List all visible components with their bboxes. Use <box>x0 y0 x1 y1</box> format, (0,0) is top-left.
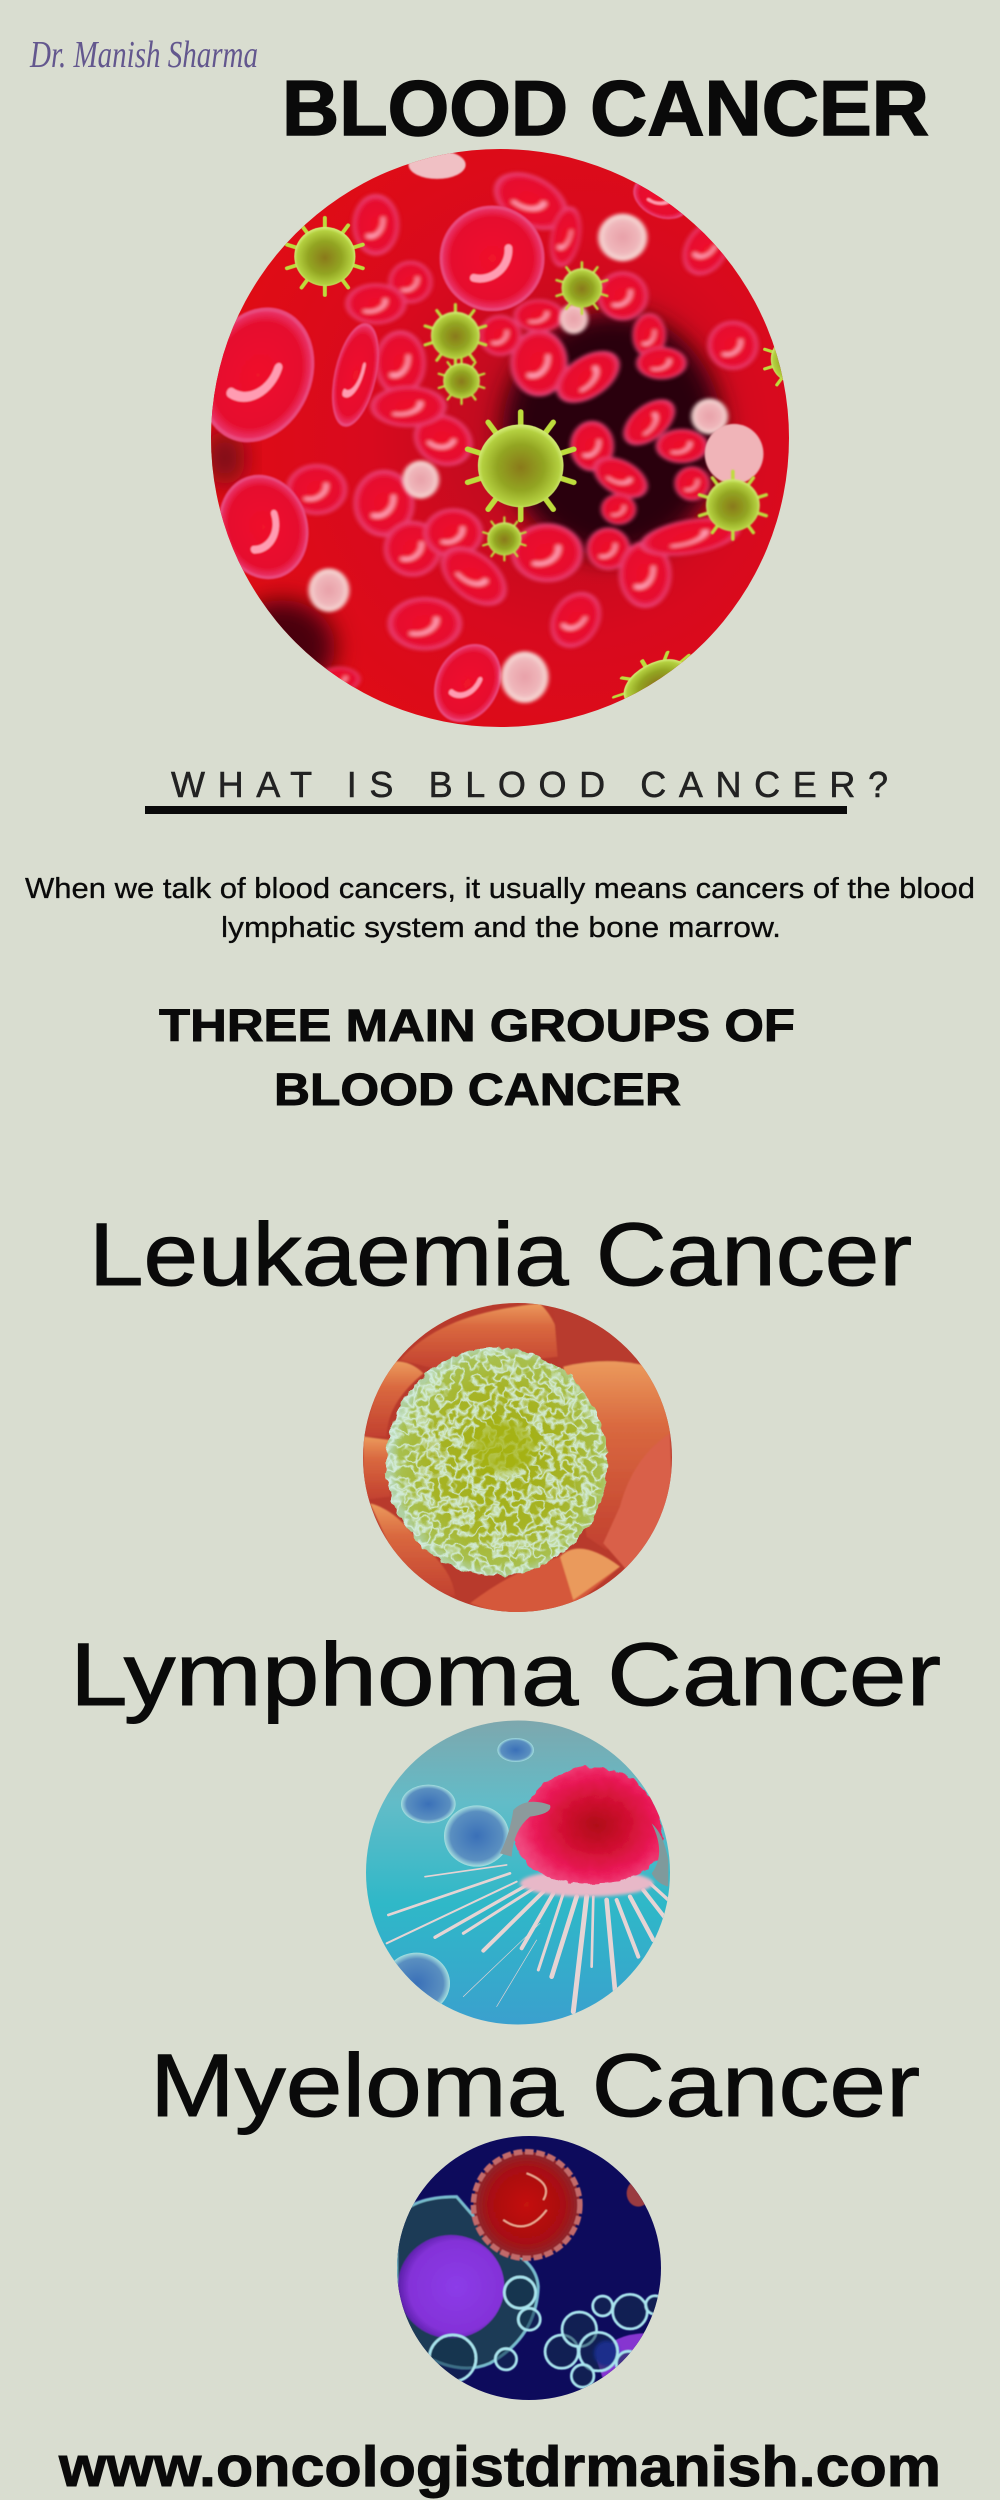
tendrils <box>387 1865 668 2012</box>
heading underline <box>145 806 847 814</box>
image: leukaemia cell <box>360 1300 675 1617</box>
dark shadow lower left <box>254 583 352 674</box>
green leukaemia cell <box>386 1348 607 1576</box>
surrounding red blood cells <box>363 1303 673 1617</box>
heading: leukaemia: Leukaemia Cancer <box>89 1204 912 1304</box>
sharp red cells <box>211 182 684 723</box>
heading: what is blood cancer: WHAT IS BLOOD CANCER? <box>171 764 888 805</box>
right cluster purple <box>597 2333 647 2380</box>
subheading: three main groups: THREE MAIN GROUPS OF <box>159 1000 795 1051</box>
distant red cell <box>627 2180 650 2207</box>
subheading: three main groups: BLOOD CANCER <box>274 1064 681 1115</box>
red cell <box>473 2152 580 2258</box>
signature: Dr. Manish Sharma: Dr. Manish Sharma <box>29 34 258 76</box>
blurred distant red cells <box>287 162 757 691</box>
image: myeloma cells <box>397 2136 661 2400</box>
grey growths <box>500 1802 550 1857</box>
green cancer cells <box>287 218 363 295</box>
subheading: three main groups <box>159 1000 795 1115</box>
heading: lymphoma: Lymphoma Cancer <box>70 1624 941 1724</box>
website url: www.oncologistdrmanish.com <box>58 2435 941 2499</box>
title: BLOOD CANCER <box>282 64 929 152</box>
heading: myeloma: Myeloma Cancer <box>150 2035 920 2135</box>
purple nucleus <box>398 2235 504 2338</box>
blue domes <box>497 1738 534 1762</box>
definition paragraph: lymphatic system and the bone marrow. <box>221 912 781 944</box>
grey cell body <box>397 2197 538 2368</box>
image: lymphoma cell <box>360 1715 676 2030</box>
hero image: blood vessel with red cells and green cancer cells <box>211 149 789 727</box>
skirt under mass <box>520 1870 653 1897</box>
red mass <box>515 1767 662 1884</box>
dark lumen of vessel <box>502 312 723 557</box>
bubbles <box>429 2277 664 2387</box>
definition paragraph <box>25 873 975 944</box>
definition paragraph: When we talk of blood cancers, it usually means cancers of the blood <box>25 873 975 905</box>
white cells <box>309 214 728 703</box>
